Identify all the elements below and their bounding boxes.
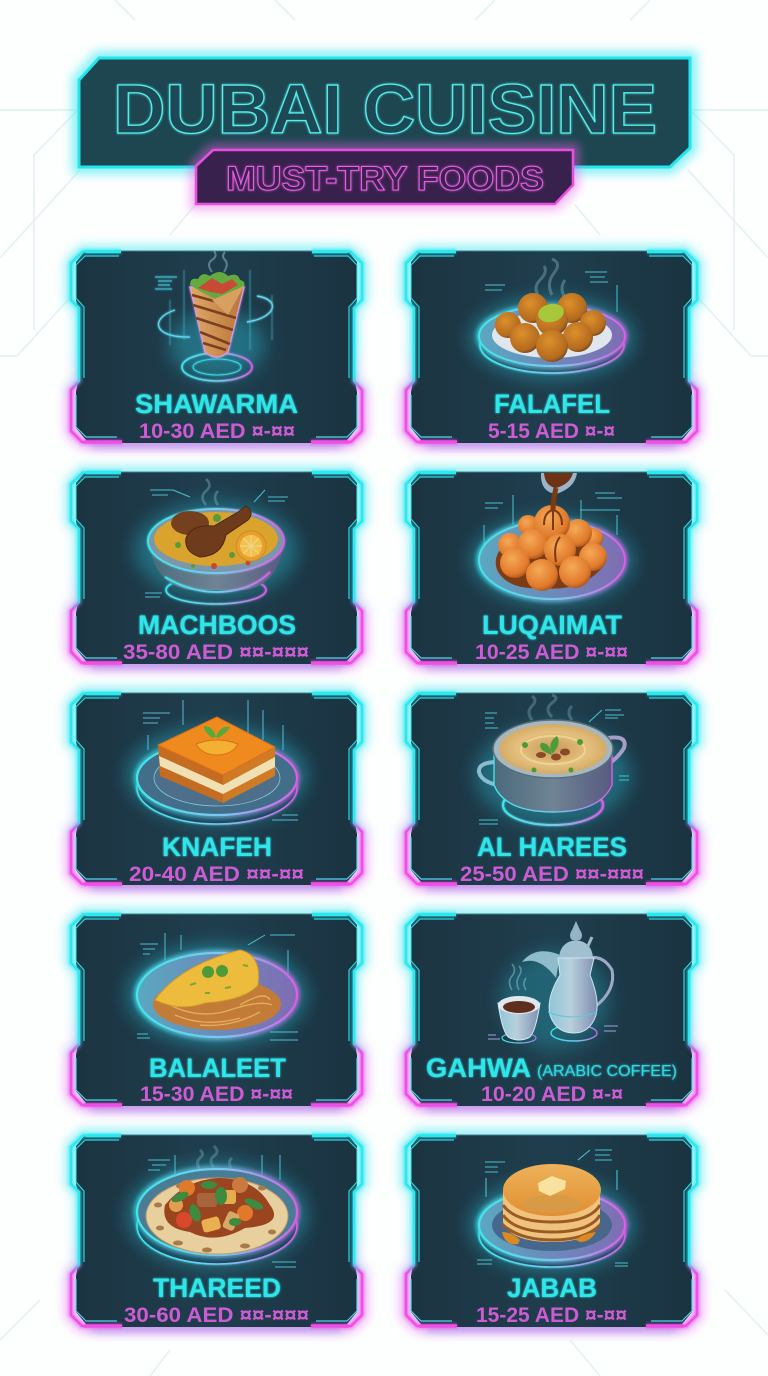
label: knafeh price: 20-40 AED ¤¤-¤¤ bbox=[129, 863, 304, 886]
label: arabic coffee note: (ARABIC COFFEE) bbox=[537, 1063, 677, 1080]
label: thareed price: 30-60 AED ¤¤-¤¤¤ bbox=[124, 1304, 309, 1327]
label: jabab name: JABAB bbox=[507, 1273, 597, 1303]
label: luqaimat name: LUQAIMAT bbox=[482, 610, 622, 640]
label: jabab price: 15-25 AED ¤-¤¤ bbox=[476, 1304, 627, 1327]
panel: gahwa bbox=[406, 914, 697, 1111]
panel: shawarma bbox=[71, 251, 362, 448]
panel: falafel bbox=[406, 251, 697, 448]
icon: al harees pot bbox=[475, 695, 631, 825]
title banner bbox=[79, 58, 690, 167]
label: knafeh name: KNAFEH bbox=[162, 832, 272, 862]
icon: thareed bbox=[127, 1146, 307, 1267]
panel: knafeh bbox=[71, 693, 362, 890]
icon: coffee cup and dallah bbox=[488, 921, 618, 1050]
subtitle: MUST-TRY FOODS bbox=[226, 160, 544, 198]
icon: luqaimat bbox=[470, 473, 634, 604]
icon: shawarma bbox=[155, 251, 278, 381]
icon: knafeh bbox=[127, 700, 307, 824]
label: al harees name: AL HAREES bbox=[477, 832, 627, 862]
label: gahwa name: GAHWA bbox=[426, 1053, 531, 1083]
label: balaleet name: BALALEET bbox=[149, 1053, 286, 1083]
label: gahwa name bbox=[426, 1053, 677, 1083]
panel: jabab bbox=[406, 1135, 697, 1332]
label: balaleet price: 15-30 AED ¤-¤¤ bbox=[140, 1083, 293, 1106]
label: machboos price: 35-80 AED ¤¤-¤¤¤ bbox=[123, 641, 309, 664]
panel: thareed bbox=[71, 1135, 362, 1332]
label: falafel name: FALAFEL bbox=[494, 389, 610, 419]
subtitle banner bbox=[196, 150, 573, 204]
title: DUBAI CUISINE bbox=[113, 70, 657, 148]
panel: balaleet bbox=[71, 914, 362, 1111]
icon: balaleet bbox=[127, 933, 307, 1045]
icon: jabab pancakes bbox=[470, 1150, 634, 1271]
label: shawarma price: 10-30 AED ¤-¤¤ bbox=[139, 420, 295, 443]
label: al harees price: 25-50 AED ¤¤-¤¤¤ bbox=[460, 863, 644, 886]
panel: al harees bbox=[406, 693, 697, 890]
icon: machboos bowl bbox=[134, 479, 298, 604]
label: luqaimat price: 10-25 AED ¤-¤¤ bbox=[475, 641, 628, 664]
label: thareed name: THAREED bbox=[153, 1273, 281, 1303]
label: gahwa price: 10-20 AED ¤-¤ bbox=[481, 1083, 623, 1106]
icon: falafel bbox=[470, 259, 634, 378]
panel: luqaimat bbox=[406, 472, 697, 669]
label: machboos name: MACHBOOS bbox=[138, 610, 296, 640]
label: shawarma name: SHAWARMA bbox=[135, 389, 298, 419]
panel: machboos bbox=[71, 472, 362, 669]
label: falafel price: 5-15 AED ¤-¤ bbox=[488, 420, 615, 443]
